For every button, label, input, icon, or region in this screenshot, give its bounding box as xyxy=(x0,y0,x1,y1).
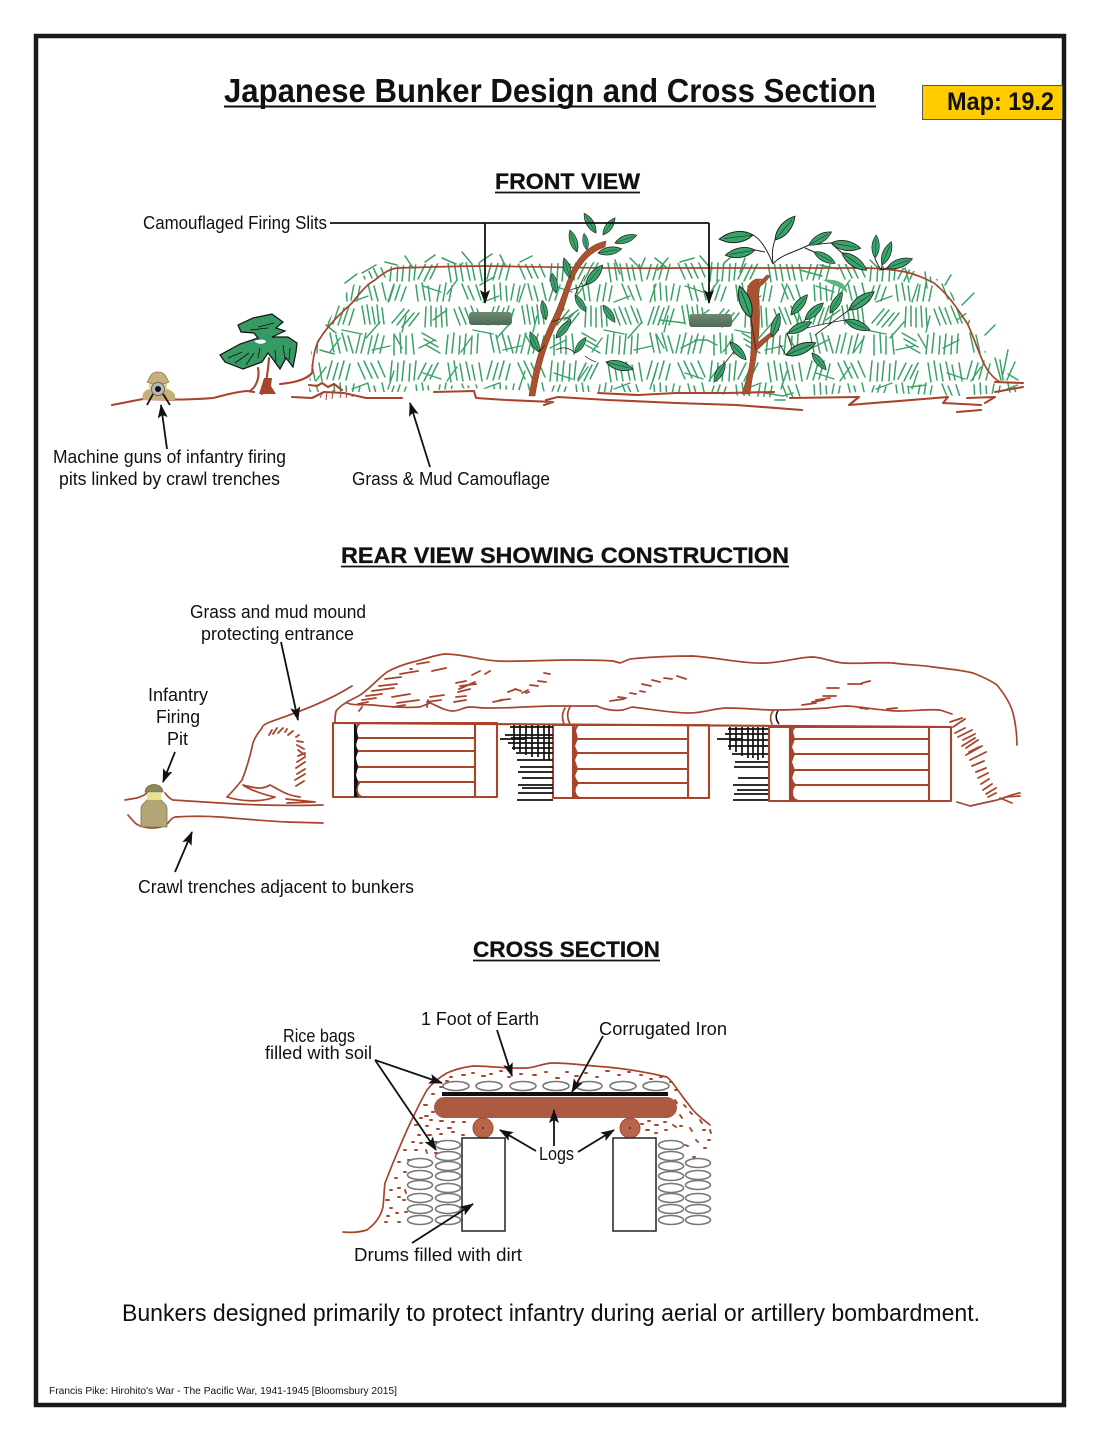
callout: logs: Logs xyxy=(539,1144,574,1164)
front view: ground xyxy=(280,373,1023,412)
cross section: earth outline xyxy=(343,1063,710,1232)
front view: tree with leaves, left xyxy=(527,211,638,396)
heading: front view: FRONT VIEW xyxy=(495,169,640,194)
heading: cross section: CROSS SECTION xyxy=(473,937,660,962)
title: Japanese Bunker Design and Cross Section xyxy=(224,72,876,109)
callout: grass and mud mound xyxy=(190,602,366,720)
front view: mound outline xyxy=(312,266,1000,382)
source credit: Francis Pike: Hirohito's War - The Pacific War, 1941-1945 [Bloomsbury 2015] xyxy=(49,1385,397,1397)
rear view: bunker left xyxy=(333,723,497,797)
callout: camouflaged firing slits: Camouflaged Firing Slits xyxy=(143,213,327,233)
callout: drums filled with dirt xyxy=(354,1204,522,1265)
front view: tree with leaves, right xyxy=(711,275,877,394)
cross section: rice bags left stack xyxy=(408,1140,460,1224)
cross section: drums xyxy=(462,1138,656,1231)
callout: infantry firing pit: Pit xyxy=(167,729,188,749)
callout: rice bags: Rice bags xyxy=(283,1026,355,1046)
callout: grass and mud mound: Grass and mud mound xyxy=(190,602,366,622)
map number badge xyxy=(922,86,1062,120)
cross section: rice bags on roof xyxy=(443,1082,669,1090)
callout: rice bags xyxy=(265,1026,442,1150)
callout: one foot of earth xyxy=(421,1009,539,1076)
callout: grass and mud camouflage: Grass & Mud Camouflage xyxy=(352,469,550,489)
callout: grass and mud camouflage xyxy=(352,403,550,489)
cross section: rice bags right stack xyxy=(658,1140,710,1224)
cross section: soil speckles xyxy=(385,1071,711,1222)
cross section: corrugated iron xyxy=(442,1092,668,1096)
rear view: soldier in firing pit xyxy=(141,784,167,827)
cross section: main log xyxy=(434,1097,677,1118)
callout: drums filled with dirt: Drums filled with dirt xyxy=(354,1245,522,1265)
callout: grass and mud mound: protecting entrance xyxy=(201,624,354,644)
heading: rear view: REAR VIEW SHOWING CONSTRUCTION xyxy=(341,543,789,568)
front view: machine gun pit xyxy=(112,372,254,405)
front view: leafy branch on top of mound xyxy=(719,213,914,274)
front view: firing slits xyxy=(469,312,732,327)
front view: small tree xyxy=(220,314,297,394)
rear view: black reinforcing, second gap xyxy=(717,727,768,800)
rear view: black reinforcing, first gap xyxy=(500,725,553,800)
cross section: small logs xyxy=(473,1118,640,1138)
callout: corrugated iron xyxy=(572,1019,727,1092)
callout: machine guns: pits linked by crawl trenches xyxy=(59,469,280,489)
map number badge: Map: 19.2 xyxy=(947,88,1054,116)
rear view: bunker right xyxy=(769,727,951,801)
rear view: right slope hatching xyxy=(950,718,1020,806)
callout: infantry firing pit: Firing xyxy=(156,707,200,727)
callout: machine guns xyxy=(53,405,286,489)
caption: Bunkers designed primarily to protect infantry during aerial or artillery bombardment. xyxy=(122,1300,980,1327)
rear view: roof mound xyxy=(333,654,1017,745)
callout: crawl trenches: Crawl trenches adjacent to bunkers xyxy=(138,877,414,897)
callout: crawl trenches xyxy=(138,832,414,897)
callout: rice bags: filled with soil xyxy=(265,1043,372,1063)
callout: infantry firing pit xyxy=(148,685,208,782)
rear view: entrance mound xyxy=(125,686,352,828)
rear view: bunker centre xyxy=(553,725,709,798)
callout: one foot of earth: 1 Foot of Earth xyxy=(421,1009,539,1029)
callout: corrugated iron: Corrugated Iron xyxy=(599,1019,727,1039)
callout: machine guns: Machine guns of infantry firing xyxy=(53,447,286,467)
callout: infantry firing pit: Infantry xyxy=(148,685,208,705)
front view: grass mound xyxy=(309,252,1018,400)
callout: logs xyxy=(500,1110,614,1164)
